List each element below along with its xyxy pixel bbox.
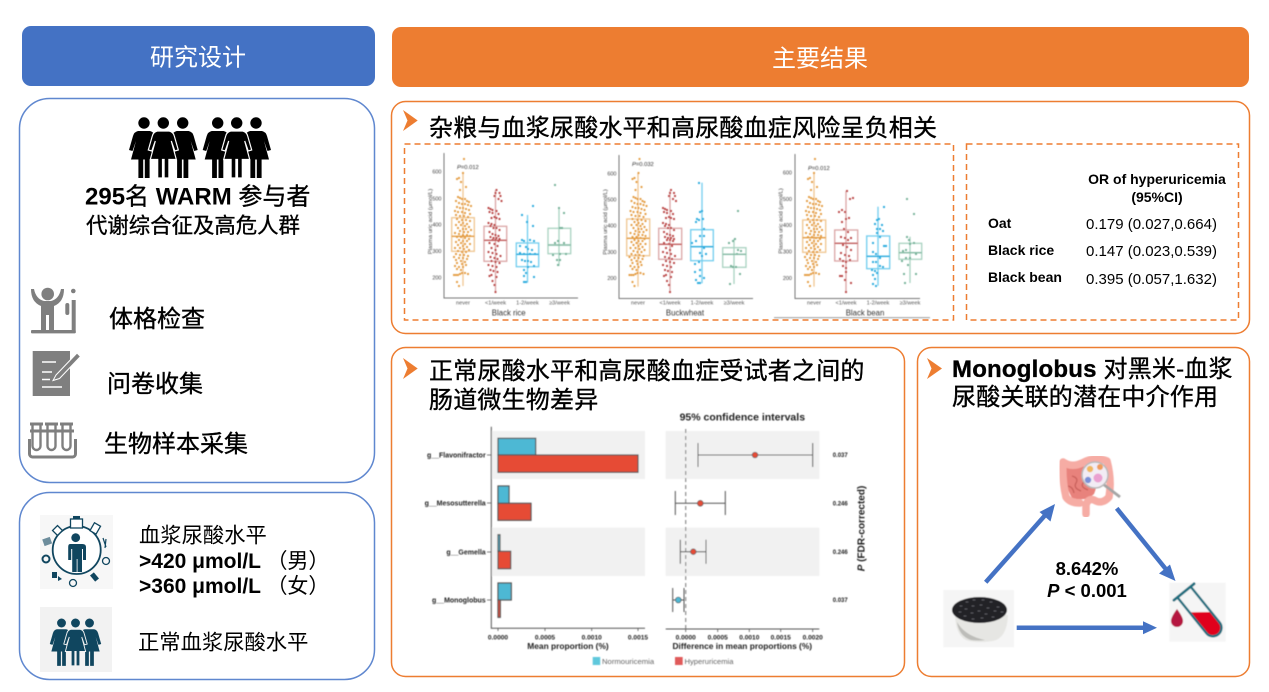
chart: buckwheat boxplot: 200 (607, 276, 616, 282)
chart: black rice boxplot: 500 (432, 196, 442, 202)
chart: black rice boxplot: P=0.012 (457, 165, 479, 171)
chart: buckwheat boxplot (603, 155, 753, 318)
table header: OR of hyperuricemia (1088, 171, 1226, 187)
panel: Monoglobus mediation (918, 348, 1250, 676)
panel: coarse grains and uric acid (392, 102, 1250, 334)
chart: black bean boxplot: never (807, 300, 821, 306)
legend: hyperuricemia: Hyperuricemia (684, 657, 734, 666)
chart: black bean boxplot: 400 (783, 223, 792, 229)
icon: group of participants (129, 117, 271, 178)
text: hyperuricemia criteria (139, 524, 329, 598)
legend: normouricemia: Normouricemia (602, 657, 655, 666)
table header: (95%CI) (1131, 189, 1183, 205)
chart: mean proportion bars (425, 427, 655, 666)
row: black bean (988, 269, 1217, 288)
chart: confidence intervals: 0.0020 (803, 634, 823, 642)
chart: black rice boxplot: 600 (432, 170, 442, 176)
label: physical exam: 体格检查 (109, 306, 205, 333)
chart: black rice boxplot: Black rice (492, 308, 526, 318)
chart: buckwheat boxplot: Plasma uric acid (μmol/L) (603, 189, 609, 255)
heading: coarse grains: 杂粮与血浆尿酸水平和高尿酸血症风险呈负相关 (429, 115, 937, 142)
header: main results (392, 27, 1249, 87)
chart: black rice boxplot: 300 (432, 249, 442, 255)
chart: confidence intervals: 0.037 (833, 453, 848, 459)
chart: black bean boxplot: 600 (783, 171, 792, 177)
label: questionnaire: 问卷收集 (107, 371, 203, 398)
chart: black bean boxplot: 500 (783, 197, 792, 203)
chart: black rice boxplot: ≥3/week (549, 300, 570, 306)
chart: buckwheat boxplot: 600 (607, 171, 616, 177)
chart: black bean boxplot: 300 (783, 250, 792, 256)
icon: questionnaire (33, 351, 80, 396)
row: black bean: Black bean (988, 269, 1062, 285)
dashed box: boxplots (404, 144, 954, 320)
heading: gut microbiota: 肠道微生物差异 (429, 387, 598, 414)
text: mediation proportion: 8.642% (1056, 558, 1118, 579)
chart: buckwheat boxplot: P=0.032 (632, 162, 654, 168)
text: hyperuricemia criteria: 血浆尿酸水平 (139, 524, 267, 548)
chart: black bean boxplot: <1/week (836, 300, 857, 306)
chart: black bean boxplot: 200 (783, 276, 792, 282)
chart: mean proportion bars: g__Mesosutterella (425, 500, 486, 508)
text: mediation proportion: P < 0.001 (1047, 580, 1127, 601)
chart: confidence intervals: 0.0000 (676, 634, 696, 642)
chart: mean proportion bars: 0.0005 (535, 634, 555, 642)
text: population: 代谢综合征及高危人群 (86, 214, 300, 238)
chart: black rice boxplot: 1-2/week (516, 300, 539, 306)
chart: mean proportion bars: g__Gemella (446, 550, 486, 556)
arrow: black rice to gut (986, 504, 1055, 582)
text: hyperuricemia criteria: >360 μmol/L （女） (139, 575, 329, 598)
label: biological samples: 生物样本采集 (104, 431, 248, 458)
chart: black rice boxplot: never (456, 300, 470, 306)
chart: buckwheat boxplot: 400 (607, 224, 616, 230)
chart: buckwheat boxplot: Buckwheat (666, 308, 705, 318)
chart: buckwheat boxplot: <1/week (660, 300, 681, 306)
heading: gut microbiota: 正常尿酸水平和高尿酸血症受试者之间的 (429, 358, 865, 385)
row: oat: 0.179 (0.027,0.664) (1086, 216, 1217, 233)
chart: confidence intervals: Difference in mean proportions (%) (672, 641, 812, 651)
panel: gut microbiota differences (392, 348, 904, 676)
header: study design: 研究设计 (150, 44, 246, 72)
heading: mediation: Monoglobus 对黑米-血浆 (952, 356, 1233, 383)
header: study design (22, 26, 375, 86)
chart: black bean boxplot (774, 154, 930, 318)
chart: confidence intervals: 0.0010 (739, 634, 760, 642)
chart: mean proportion bars: g__Flavonifractor (427, 452, 486, 460)
chart: black rice boxplot: 200 (432, 275, 442, 281)
panel: hyperuricemia definition (20, 492, 374, 680)
icon: intestine with magnifier (1063, 459, 1120, 514)
chart: confidence intervals: 0.0015 (771, 634, 791, 642)
chart: confidence intervals: 95% confidence intervals (680, 412, 805, 424)
arrow: gut to uric acid (1117, 508, 1176, 581)
chart: black rice boxplot: <1/week (485, 300, 506, 306)
icon: section chevron (927, 358, 942, 379)
row: black rice (988, 242, 1217, 260)
chart: confidence intervals: 0.246 (833, 502, 848, 508)
icon: biological samples (30, 424, 76, 457)
icon: bowl of black rice (943, 590, 1014, 647)
chart: black bean boxplot: 1-2/week (867, 300, 890, 306)
icon: blood test tube (1170, 582, 1225, 641)
chart: confidence intervals: 0.0005 (708, 634, 728, 642)
chart: confidence intervals (666, 412, 868, 666)
text: hyperuricemia criteria: >420 μmol/L （男） (139, 550, 329, 573)
chart: buckwheat boxplot: 300 (607, 250, 616, 256)
chart: buckwheat boxplot: ≥3/week (724, 300, 745, 306)
chart: confidence intervals: 0.246 (833, 550, 848, 556)
row: black rice: Black rice (988, 242, 1054, 258)
row: black rice: 0.147 (0.023,0.539) (1086, 243, 1217, 260)
text: mediation proportion (1047, 558, 1127, 601)
chart: mean proportion bars: 0.0010 (582, 634, 602, 642)
row: black bean: 0.395 (0.057,1.632) (1086, 271, 1217, 288)
row: oat (988, 215, 1217, 233)
chart: buckwheat boxplot: 500 (607, 197, 616, 203)
text: normal uric acid: 正常血浆尿酸水平 (138, 630, 308, 654)
chart: confidence intervals: P (FDR-corrected) (856, 486, 868, 571)
heading: mediation: 尿酸关联的潜在中介作用 (952, 384, 1218, 411)
chart: mean proportion bars: 0.0000 (488, 634, 508, 642)
chart: black bean boxplot: Black bean (846, 308, 884, 318)
chart: mean proportion bars: Mean proportion (%) (527, 641, 609, 651)
chart: black bean boxplot: Plasma uric acid (μmol/L) (778, 188, 784, 254)
chart: black rice boxplot (428, 153, 578, 318)
dashed box: odds ratio table (966, 144, 1238, 320)
text: participant count: 295名 WARM 参与者 (85, 184, 310, 210)
chart: buckwheat boxplot: 1-2/week (691, 300, 714, 306)
chart: black bean boxplot: ≥3/week (900, 300, 921, 306)
chart: black rice boxplot: Plasma uric acid (μmol/L) (428, 189, 434, 254)
chart: mean proportion bars: g__Monoglobus (432, 598, 486, 604)
chart: confidence intervals: 0.037 (833, 598, 848, 604)
icon: section chevron (403, 358, 418, 379)
chart: buckwheat boxplot: never (631, 300, 645, 306)
icon: section chevron (403, 110, 418, 131)
row: oat: Oat (988, 215, 1012, 231)
icon: physical exam (31, 288, 76, 333)
arrow: black rice to uric acid (1017, 621, 1157, 634)
chart: black rice boxplot: 400 (432, 223, 442, 229)
panel: participants and measurements (20, 98, 374, 482)
header: main results: 主要结果 (772, 46, 868, 72)
icon: hyperuricemia person with surrounding items (40, 515, 113, 589)
icon: normal uric acid group (40, 607, 112, 672)
chart: black bean boxplot: P=0.012 (808, 166, 830, 172)
chart: mean proportion bars: 0.0015 (628, 634, 648, 642)
